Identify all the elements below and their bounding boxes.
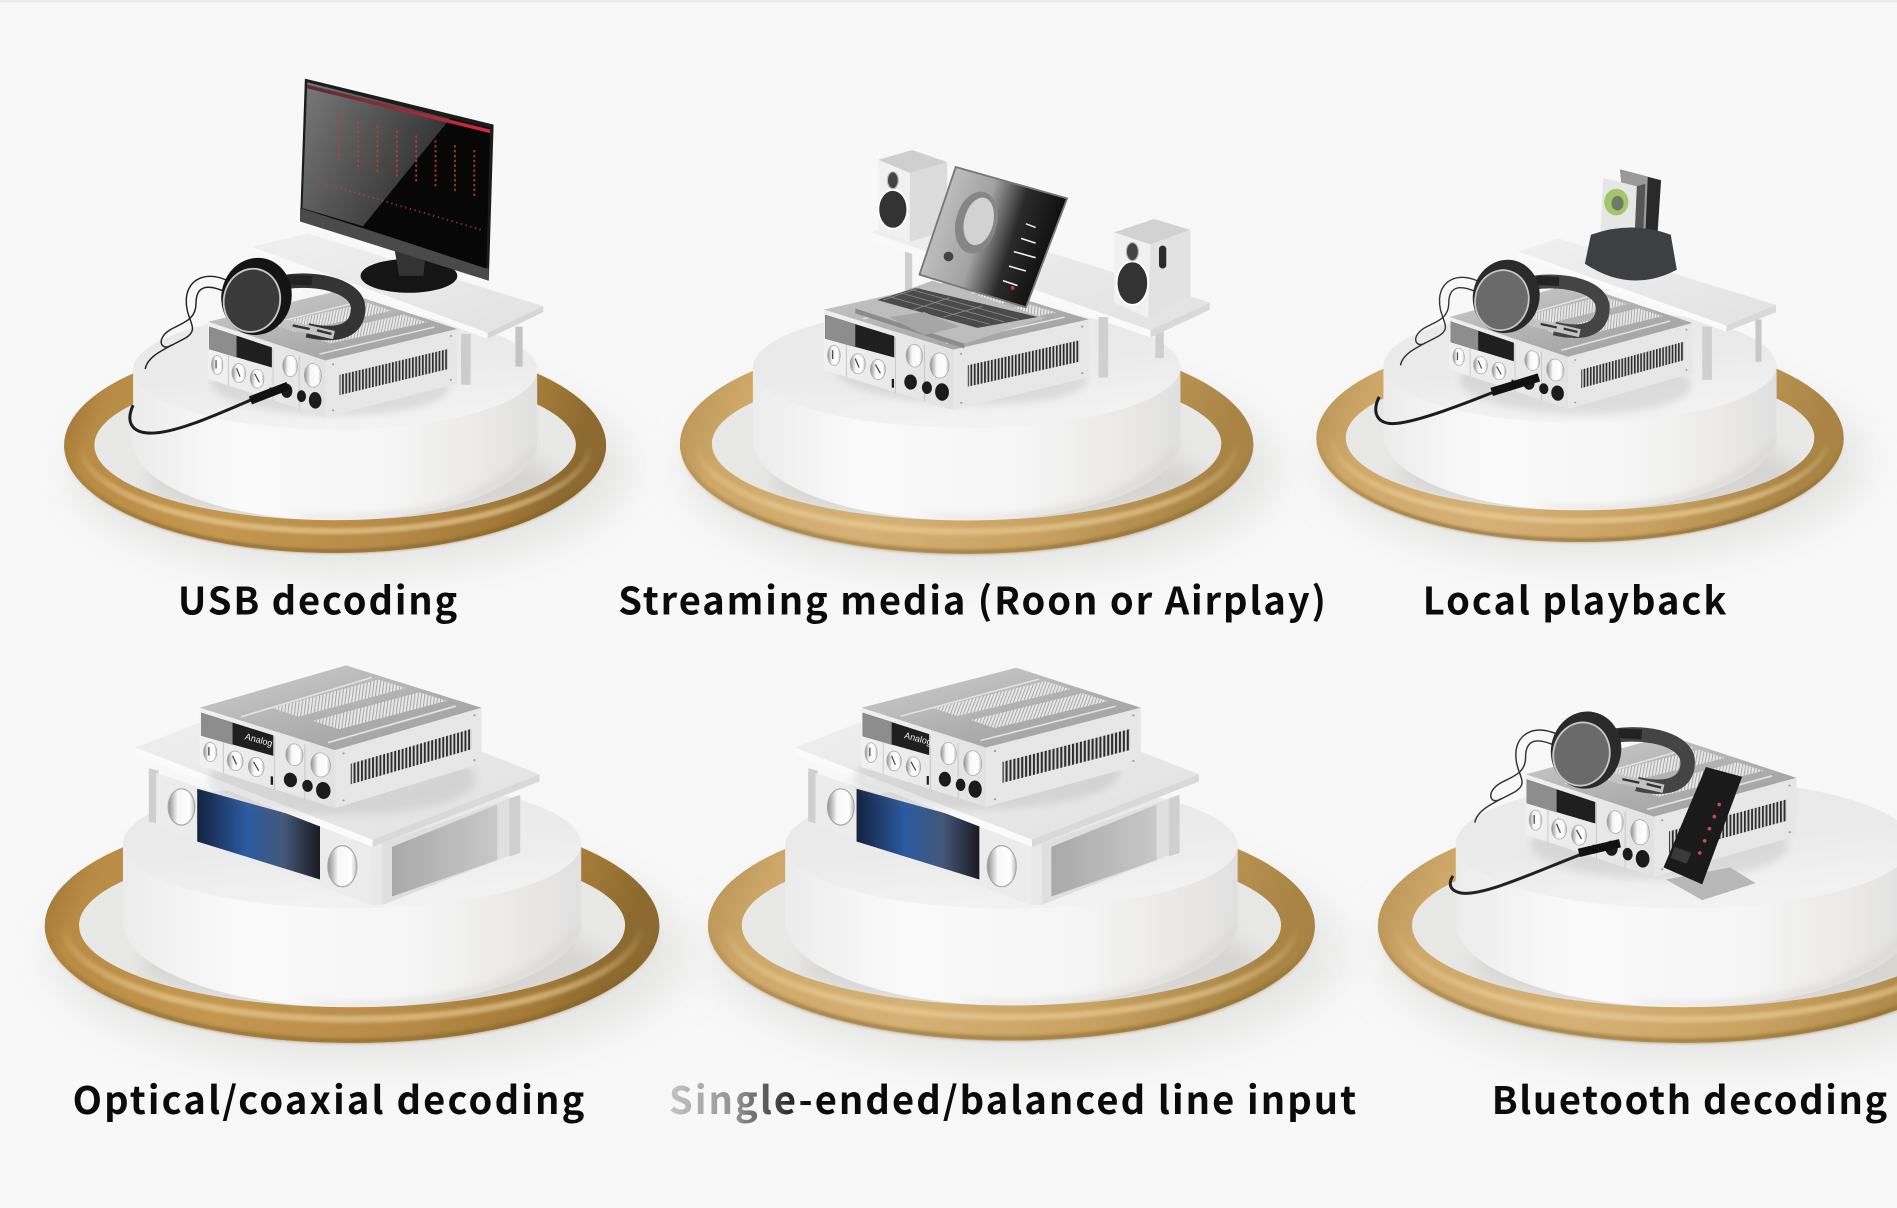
gold ring and pedestal xyxy=(45,779,687,1065)
headphones xyxy=(145,251,358,369)
streamer under shelf xyxy=(136,682,540,905)
amplifier on top xyxy=(823,667,1160,810)
white shelf xyxy=(252,233,543,385)
amplifier xyxy=(816,274,1096,416)
shelf rear leg xyxy=(1755,319,1761,362)
laptop keyboard xyxy=(855,281,1045,348)
label: Streaming media (Roon or Airplay) xyxy=(618,571,1326,626)
amplifier display text: Analog xyxy=(903,730,933,747)
hard drive dock xyxy=(1585,169,1677,281)
streamer under shelf xyxy=(795,682,1199,905)
gold ring and pedestal xyxy=(1378,779,1897,1065)
tablet xyxy=(919,167,1067,307)
label: Bluetooth decoding xyxy=(1492,1070,1888,1125)
phone on stand xyxy=(1664,767,1755,900)
shelf rear leg xyxy=(515,327,523,367)
headphones xyxy=(1400,254,1603,365)
label: Single-ended/balanced line input xyxy=(669,1070,1356,1125)
amplifier display text: Analog xyxy=(244,731,274,748)
panel: USB decoding xyxy=(64,79,630,626)
label: Local playback xyxy=(1423,571,1726,626)
audio cable xyxy=(1376,377,1539,424)
panel: Bluetooth decoding xyxy=(1378,705,1897,1125)
white shelf xyxy=(871,215,1210,377)
headphones xyxy=(1475,705,1688,823)
amplifier on top xyxy=(186,665,491,816)
white shelf xyxy=(1518,238,1776,380)
amplifier xyxy=(1442,279,1699,418)
gold ring and pedestal xyxy=(1316,308,1867,562)
amplifier xyxy=(1507,733,1808,882)
label: USB decoding xyxy=(178,571,458,626)
label: Optical/coaxial decoding xyxy=(73,1070,585,1125)
monitor on stand xyxy=(300,79,494,293)
right speaker xyxy=(1114,219,1190,318)
gold ring and pedestal xyxy=(64,311,630,573)
panel: local playback xyxy=(1316,169,1867,626)
panel: line input xyxy=(669,667,1356,1125)
gold ring and pedestal xyxy=(680,307,1279,575)
left speaker xyxy=(878,150,947,242)
audio cable xyxy=(130,386,288,433)
audio cable xyxy=(1450,843,1620,893)
gold ring and pedestal xyxy=(708,782,1342,1062)
panel: optical/coaxial decoding xyxy=(45,665,687,1125)
shelf legs xyxy=(905,248,1164,358)
amplifier xyxy=(190,286,468,420)
panel: streaming media xyxy=(618,150,1326,626)
